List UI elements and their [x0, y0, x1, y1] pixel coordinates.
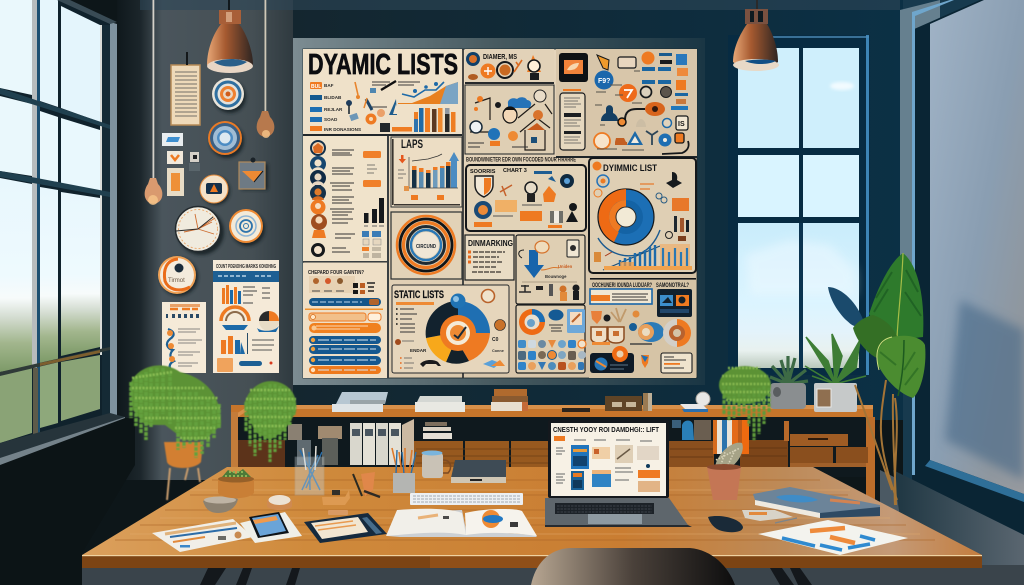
ceiling lamp: left copper	[207, 0, 253, 73]
heading: DINMARKING	[468, 238, 513, 248]
title: DYAMIC LISTS	[308, 49, 458, 81]
panel: static lists	[392, 285, 509, 373]
wall decor: plate one	[212, 78, 246, 113]
wall decor: plate five	[158, 256, 198, 296]
blue rows	[309, 336, 381, 374]
panel: people list	[303, 136, 387, 261]
icons	[474, 171, 578, 228]
cabinet drawers center	[669, 440, 788, 468]
callout	[535, 241, 549, 253]
hanging fern: shelf left	[244, 381, 296, 462]
icon: screen	[559, 53, 588, 82]
hanging fern: left planter	[130, 365, 221, 500]
legend rows: REJLAR	[324, 107, 343, 112]
blue blob	[548, 310, 564, 320]
stacked paper	[423, 422, 452, 439]
panel: dinmarking	[465, 235, 514, 280]
right illustrations	[590, 308, 692, 373]
blue callout	[590, 289, 652, 304]
wall decor: plate five: Tirmot	[168, 278, 185, 284]
heading: LAPS	[401, 139, 423, 151]
desk item: mug	[422, 450, 451, 478]
heading: DYIMMIC LIST	[603, 163, 657, 174]
potted succulent: white pot	[805, 334, 866, 412]
desk item: clip holder	[322, 490, 350, 505]
blue pill	[309, 298, 381, 306]
panel: chepard promo list	[303, 263, 387, 378]
wall decor: plate three	[200, 175, 230, 205]
bar chart	[603, 244, 692, 270]
shelf-top books	[332, 389, 710, 412]
desk item: bowl	[203, 496, 238, 513]
icon grid: F9?	[598, 78, 610, 85]
laptop screen	[548, 420, 669, 498]
arc arrow	[598, 230, 660, 256]
icons	[466, 52, 541, 80]
label: SOORRIS	[470, 169, 496, 175]
mini columns	[217, 333, 274, 372]
scattered icons	[346, 81, 420, 132]
pendant bulb: far	[257, 0, 274, 138]
desk item: keyboard	[410, 493, 523, 505]
poster frame	[293, 38, 705, 385]
callout icons: ENDAR	[410, 348, 427, 353]
callout icons: Conne	[492, 349, 504, 353]
panel: chart 3	[466, 165, 586, 231]
panel: diamer ms	[465, 49, 554, 84]
bar chart	[414, 108, 456, 132]
legend rows: BUL	[311, 84, 321, 90]
laptop title: CNESTH YOOY ROI DAMDHGI:: LIFT	[553, 425, 659, 434]
desk top	[82, 467, 982, 555]
right window	[728, 35, 870, 375]
desk item: pen cup	[392, 448, 416, 493]
wall clock	[176, 206, 224, 255]
desk item: small eraser	[328, 510, 348, 515]
list lines	[472, 252, 505, 272]
desk	[0, 418, 1024, 585]
legend rows: BAF	[324, 83, 334, 88]
mini bars	[222, 285, 270, 304]
desk item: mouse	[708, 516, 743, 532]
panel: dyamic lists title	[303, 49, 462, 134]
heading strip: BOUNDWIN/ETER EDR OWN FOCODED NOUR FIRARRE	[466, 158, 576, 164]
panel: face diagram	[465, 85, 554, 154]
desk item: phone on paper	[240, 512, 302, 543]
labels: Bouwnoge	[545, 274, 567, 279]
desk item: glass pen holder	[295, 446, 324, 495]
desk item: orange planter	[218, 469, 254, 498]
orange tags	[363, 151, 381, 187]
cactus in pot	[707, 443, 743, 500]
laptop	[545, 420, 692, 527]
node icons	[468, 96, 545, 147]
storage boxes	[288, 424, 342, 465]
area trend chart	[398, 82, 458, 104]
desk item: open book	[386, 509, 537, 537]
gauge label: CIRCUND	[416, 244, 436, 250]
panel: circular gauge	[391, 212, 462, 279]
legend rows	[310, 82, 361, 132]
people avatars	[310, 140, 327, 257]
panel: icon grid	[516, 305, 586, 373]
wall decor: small cards	[162, 133, 200, 196]
labels	[519, 250, 580, 301]
wall decor: plate two	[208, 121, 244, 158]
icon: orange down arrow	[399, 155, 406, 163]
panel: top-right icon cluster	[556, 49, 697, 156]
donut	[519, 309, 545, 335]
list card	[560, 89, 585, 150]
labels: Uniden	[558, 264, 573, 269]
list lines	[400, 309, 417, 332]
laptop base	[545, 498, 692, 527]
frosted side window	[912, 0, 1024, 502]
open drawers left	[414, 441, 550, 469]
wall decor: plate four	[229, 209, 265, 246]
donut chart	[426, 294, 490, 364]
hanging fern: right shelf	[719, 366, 771, 440]
laptop screen cards	[554, 436, 660, 492]
heading: DIAMER, MS	[483, 54, 517, 61]
side icons	[594, 172, 689, 262]
wall poster: small	[162, 302, 206, 373]
legend rows: BLIDAB	[324, 95, 342, 100]
panel: dynamic list chart	[589, 158, 696, 273]
icon: faces	[503, 90, 546, 123]
big donut	[598, 189, 654, 245]
ceiling lamp: right copper	[733, 0, 779, 71]
desk item: round box	[267, 495, 292, 510]
dark dashboard	[657, 289, 692, 317]
poster heading: COUNT POENOHIG MARIKS KONOHING	[216, 264, 276, 270]
binder row	[350, 419, 414, 465]
heading: STATIC LISTS	[394, 289, 444, 301]
blue tile	[567, 309, 585, 333]
heading: OOCHUNERI IOUNDA LUDIJAR?	[592, 282, 652, 289]
chair back	[531, 548, 735, 585]
panel: question box: SAMONOTRAL?	[656, 282, 689, 289]
icon: heading badge	[592, 162, 602, 170]
icon: blue down arrow	[524, 250, 544, 278]
icon: portrait	[567, 240, 579, 257]
shelf unit	[231, 389, 875, 502]
mini gauges	[221, 307, 279, 332]
callout icons: C0	[492, 337, 499, 343]
desk item: blue book	[753, 487, 880, 518]
pendant bulb: near	[145, 0, 162, 205]
callout icons	[395, 290, 506, 368]
left window	[0, 0, 125, 468]
desk item: card	[742, 510, 797, 523]
outlined orange rows	[309, 313, 381, 333]
desk item: dark notebook	[451, 460, 506, 483]
legend rows: SOAD	[324, 117, 338, 122]
cabinet items	[672, 420, 711, 440]
planter stand	[167, 468, 200, 500]
panel: laps chart	[391, 137, 462, 207]
wall decor: notice board	[171, 52, 200, 125]
icon grid: IS	[678, 121, 685, 128]
wall decor: clipboard	[239, 158, 268, 190]
desk edge	[82, 555, 982, 568]
mini people row	[309, 276, 375, 294]
icon: blue cloud	[508, 97, 531, 108]
network lines	[470, 98, 552, 150]
desk legs	[200, 568, 812, 585]
description lines	[330, 150, 355, 252]
desk item: paper sheet left	[152, 519, 253, 552]
dark bars	[364, 198, 384, 226]
panel: chart 3: CHART 3	[503, 168, 527, 174]
small tiles	[362, 231, 381, 258]
wall poster: tall	[213, 260, 279, 373]
tall banana plant	[828, 253, 925, 505]
desk item: paper sheet right	[758, 520, 908, 555]
potted succulent: gray pot	[770, 356, 808, 409]
icon grid	[594, 52, 689, 154]
panel: question box	[589, 278, 696, 378]
icon grid rows	[518, 340, 586, 370]
floor	[60, 565, 1024, 585]
stacked bars	[398, 152, 459, 200]
desk item: note stand	[353, 472, 380, 497]
legend rows: INR DONASIONS	[324, 127, 361, 132]
heading: CHEPARD FOUR GAINTIN?	[308, 270, 364, 276]
drawers right	[784, 421, 868, 467]
panel: arrow diagram	[516, 235, 585, 304]
shelf interior left box	[238, 440, 285, 468]
colorful binders	[713, 420, 749, 454]
desk item: tablet	[304, 513, 387, 543]
